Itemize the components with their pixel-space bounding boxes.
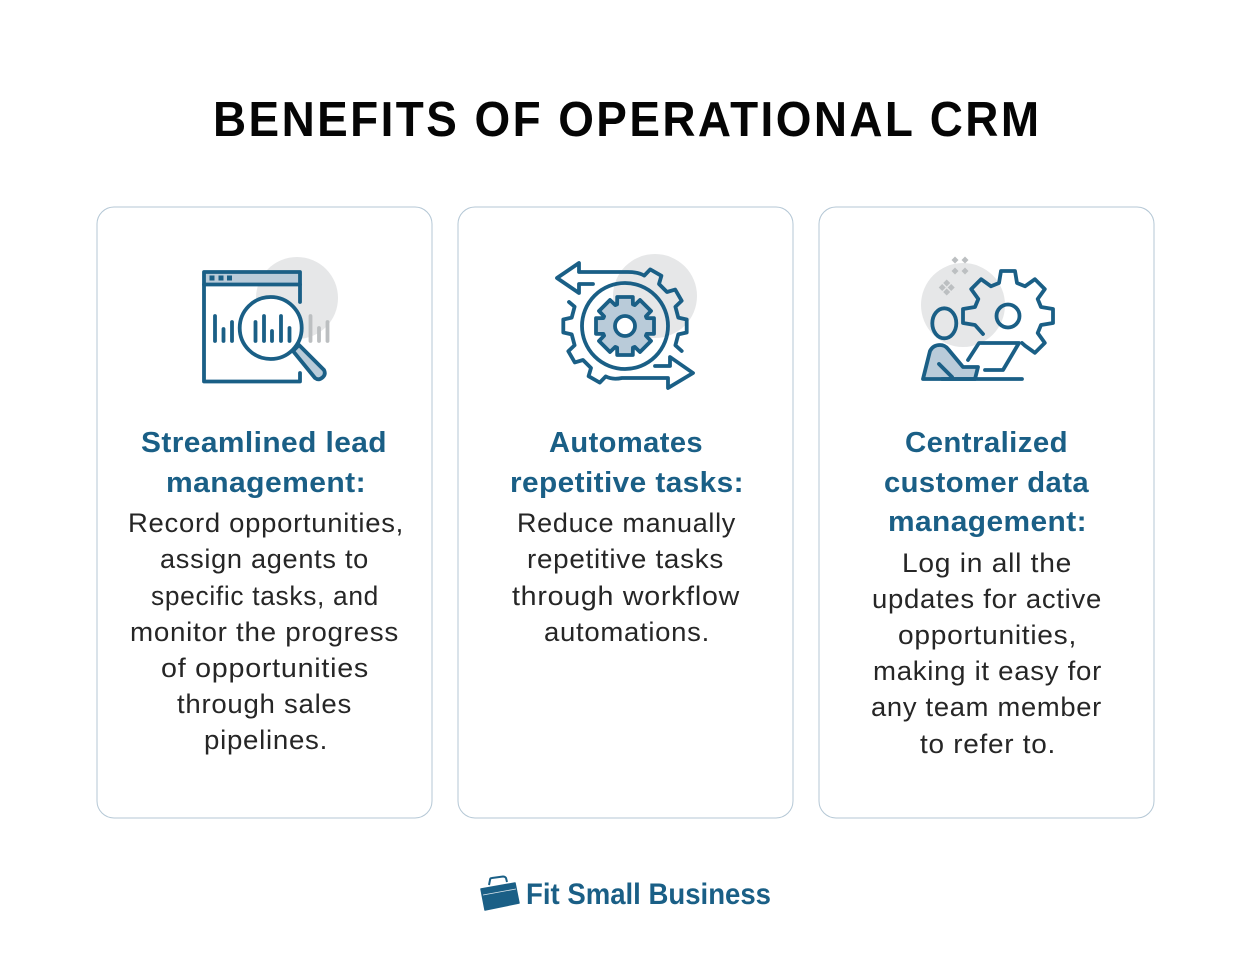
text block: any team member — [871, 692, 1102, 722]
panel: centralized customer data management — [819, 207, 1154, 818]
heading: management: — [888, 506, 1087, 538]
heading: Centralized — [905, 427, 1068, 459]
text block: pipelines. — [204, 725, 328, 755]
icon: window with magnifier and bar chart — [204, 257, 338, 382]
text block: Reduce manually — [517, 508, 736, 538]
wordmark: Fit Small Business — [526, 878, 771, 911]
text block: specific tasks, and — [151, 581, 379, 611]
text block: Record opportunities, — [128, 508, 404, 538]
text block: automations. — [544, 617, 710, 647]
text block: through sales — [177, 689, 352, 719]
icon: gears with circular arrows — [557, 254, 697, 388]
heading: management: — [166, 467, 366, 499]
text block: opportunities, — [898, 620, 1077, 650]
text block: monitor the progress — [130, 617, 399, 647]
text block — [512, 508, 740, 647]
text block: repetitive tasks — [527, 544, 724, 574]
text block — [128, 508, 404, 755]
text block: through workflow — [512, 581, 740, 611]
logo: Fit Small Business — [481, 876, 771, 911]
heading: Automates — [549, 427, 703, 459]
text block: of opportunities — [161, 653, 369, 683]
heading: repetitive tasks: — [510, 467, 744, 499]
text block: assign agents to — [160, 544, 369, 574]
text block: Log in all the — [902, 548, 1072, 578]
panel: streamlined lead management — [97, 207, 432, 818]
text block: making it easy for — [873, 656, 1102, 686]
heading — [510, 427, 744, 499]
icon: briefcase — [481, 876, 519, 910]
title: BENEFITS OF OPERATIONAL CRM — [213, 93, 1042, 147]
icon: person at laptop with gear — [921, 256, 1053, 379]
text block: to refer to. — [920, 729, 1056, 759]
heading: Streamlined lead — [141, 427, 387, 459]
text block — [871, 548, 1102, 759]
heading — [884, 427, 1089, 538]
panel: automates repetitive tasks — [458, 207, 793, 818]
heading: customer data — [884, 467, 1089, 499]
text block: updates for active — [872, 584, 1102, 614]
heading — [141, 427, 387, 499]
